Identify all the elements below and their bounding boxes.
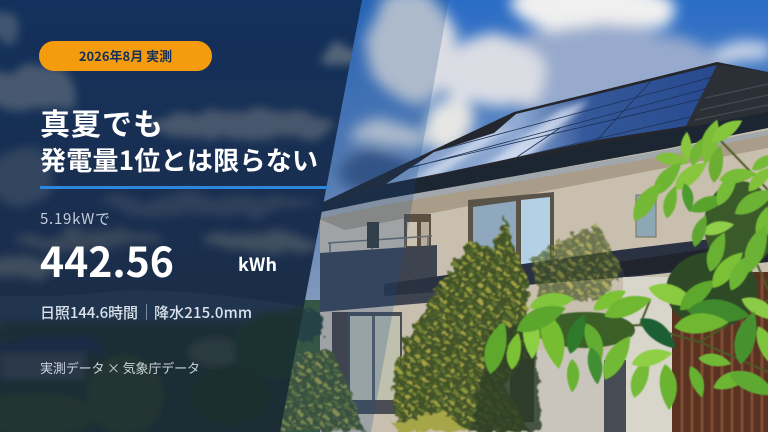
distant trees and ground	[280, 300, 400, 432]
soffit under eave	[312, 135, 768, 230]
heading: 発電量1位とは限らない	[40, 141, 318, 178]
left shrub at house corner	[280, 309, 365, 432]
translucent blue diagonal band	[280, 0, 449, 432]
small side window	[636, 195, 656, 237]
roof	[300, 62, 768, 221]
dark entry window	[510, 350, 626, 432]
tree beside house	[393, 215, 540, 432]
balcony	[320, 222, 437, 312]
small window	[404, 214, 431, 248]
data source note: 実測データ × 気象庁データ	[40, 358, 200, 377]
foreground leaves	[479, 114, 768, 411]
weather stats: 日照144.6時間	[40, 302, 138, 323]
heading underline	[40, 186, 329, 189]
dark sky	[0, 0, 368, 432]
dim village and trees	[0, 305, 304, 432]
background photo: house with solar panels	[280, 0, 768, 432]
wooden slats	[672, 272, 768, 432]
date badge	[39, 41, 212, 71]
climbing vine	[530, 225, 622, 300]
right white wall	[623, 277, 673, 432]
weather stats	[40, 302, 252, 323]
unit: kWh	[238, 251, 277, 277]
house wall	[320, 125, 768, 432]
system size label: 5.19kWで	[40, 208, 110, 229]
date badge: 2026年8月 実測	[79, 46, 172, 65]
sky with clouds	[0, 0, 768, 300]
hills	[0, 290, 292, 320]
dim clouds	[0, 9, 358, 277]
lower roof band	[384, 232, 768, 296]
upper window	[468, 192, 554, 275]
solar panels	[380, 65, 720, 185]
heading: 真夏でも	[40, 100, 163, 144]
generation value: 442.56	[40, 229, 174, 289]
dark navy left panel with dimmed landscape	[0, 0, 368, 432]
heading	[40, 100, 318, 178]
lower window	[332, 312, 402, 414]
weather stats: 降水215.0mm	[154, 302, 252, 323]
